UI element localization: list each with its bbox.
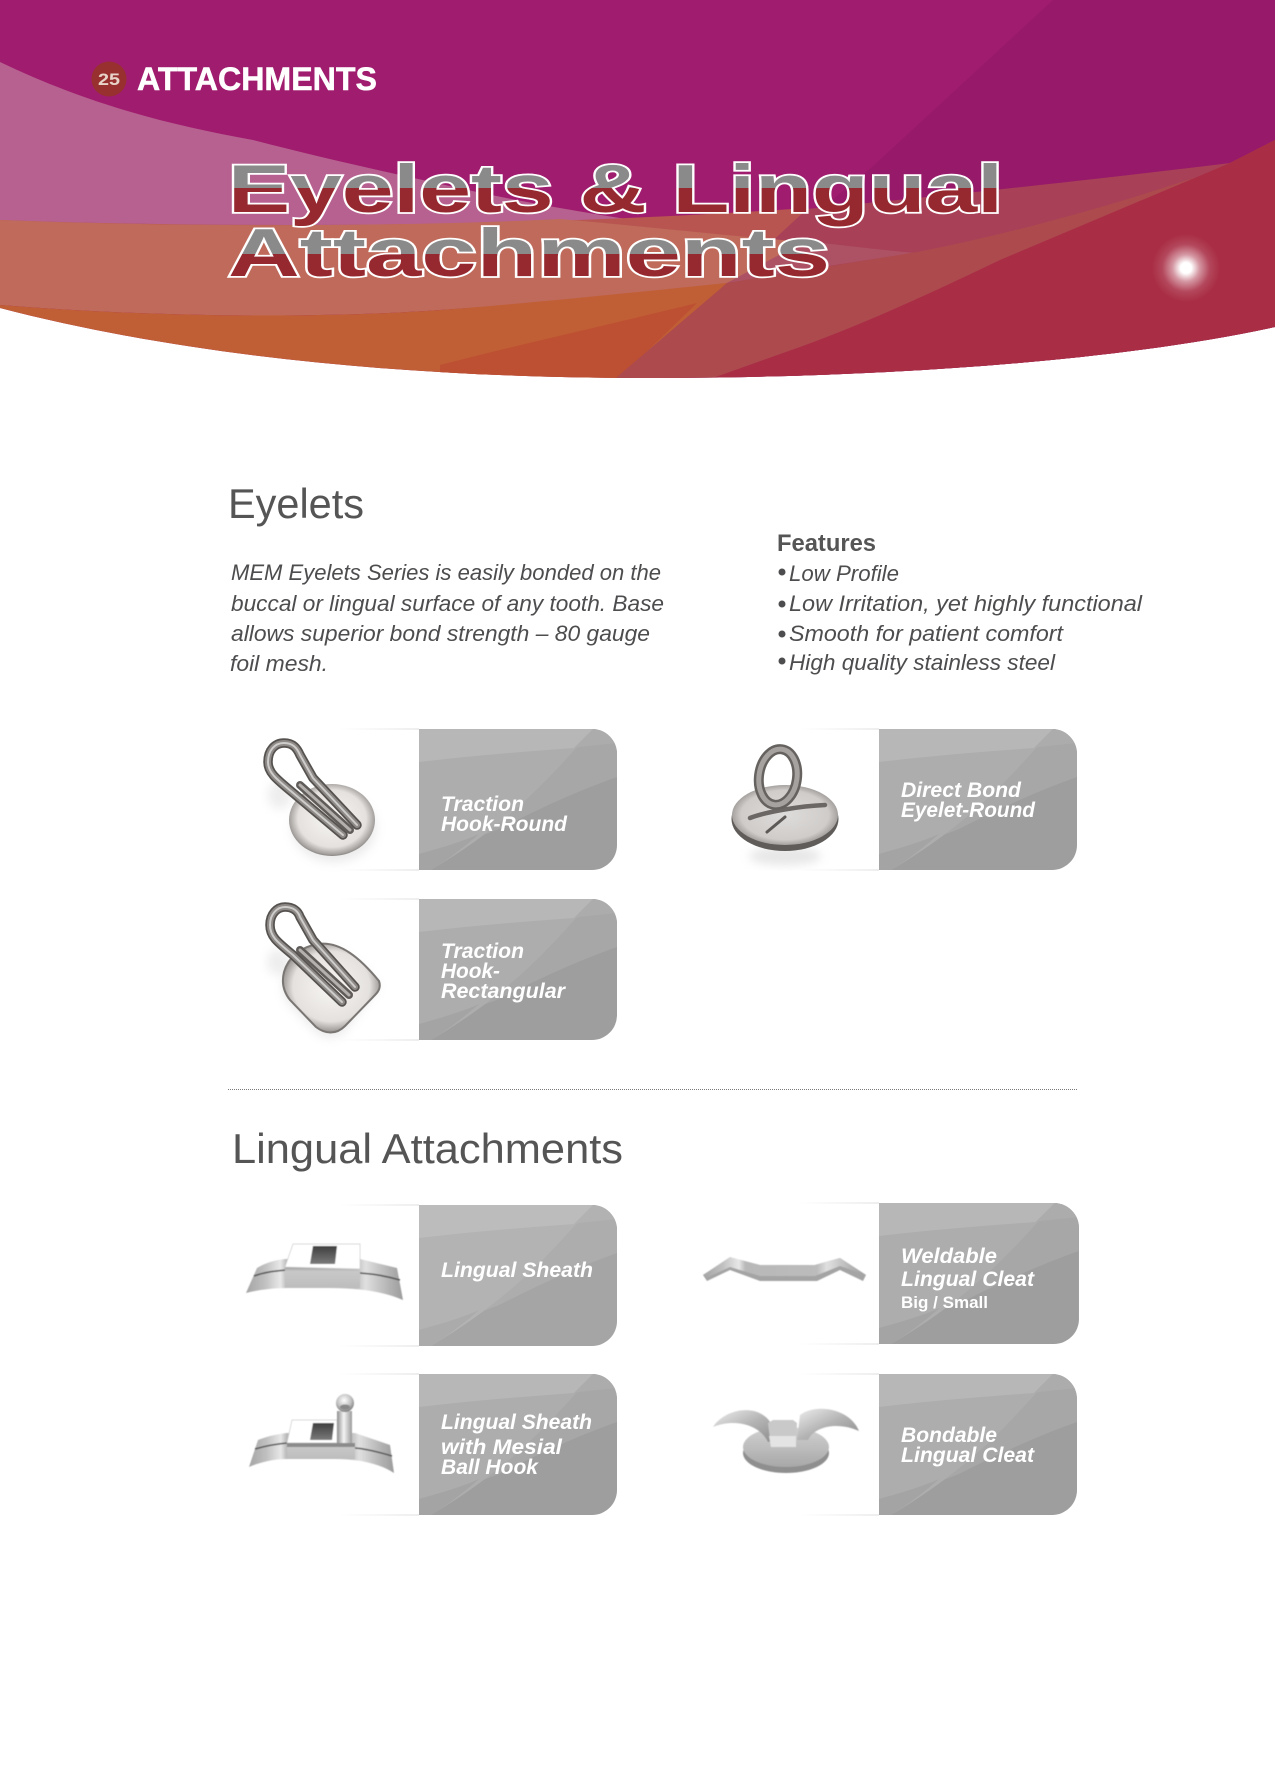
- features list: [777, 530, 1143, 675]
- feature items: Smooth for patient comfort: [789, 621, 1064, 646]
- card: Traction Hook-Round: [268, 728, 617, 870]
- label text: Lingual Sheath: [441, 1258, 593, 1282]
- product image: bondable cleat: [713, 1409, 859, 1473]
- label text: Bondable: [901, 1423, 997, 1447]
- feature items: Low Profile: [789, 561, 899, 586]
- feature items: Low Irritation, yet highly functional: [789, 591, 1143, 616]
- label panel: [339, 728, 617, 870]
- section label: ATTACHMENTS: ATTACHMENTS: [137, 61, 377, 97]
- label text: Traction: [441, 939, 524, 963]
- text block: eyelets description: foil mesh.: [230, 651, 328, 676]
- label text: Lingual Cleat: [901, 1267, 1035, 1291]
- label text: Lingual Sheath: [441, 1410, 592, 1434]
- heading: Lingual Attachments: Lingual Attachments: [232, 1125, 623, 1172]
- badge: page number 25: [92, 62, 126, 96]
- label text: [441, 1410, 592, 1479]
- product image: lingual sheath: [246, 1244, 403, 1300]
- label panel: [798, 1202, 1079, 1344]
- card: Lingual Sheath: [246, 1204, 617, 1346]
- label text: with Mesial: [441, 1435, 563, 1459]
- label text: [901, 778, 1036, 822]
- label text: Rectangular: [441, 979, 567, 1003]
- label text: [901, 1244, 1035, 1312]
- label text: Ball Hook: [441, 1455, 539, 1479]
- label text: [441, 792, 568, 836]
- feature items: [789, 561, 1143, 675]
- label panel: [339, 1204, 617, 1346]
- feature bullets: [778, 568, 786, 664]
- product image: rectangular hook: [267, 907, 380, 1038]
- label text: Big / Small: [901, 1293, 988, 1312]
- title: Eyelets & Lingual: [228, 151, 1003, 227]
- label text: [441, 939, 567, 1003]
- header banner: [0, 0, 1275, 400]
- label text: Hook-Round: [441, 812, 568, 836]
- label text: Lingual Cleat: [901, 1443, 1035, 1467]
- label text: Eyelet-Round: [901, 798, 1036, 822]
- label panel: [799, 1374, 1077, 1516]
- heading: Eyelets: Eyelets: [228, 480, 364, 527]
- label text: [901, 1423, 1035, 1467]
- title: Attachments: [228, 215, 830, 291]
- product image: round hook: [268, 743, 376, 862]
- label text: Direct Bond: [901, 778, 1022, 802]
- text block: eyelets description: allows superior bond strength – 80 gauge: [231, 621, 650, 646]
- label text: Weldable: [901, 1244, 997, 1268]
- text block: eyelets description: MEM Eyelets Series is easily bonded on the: [231, 560, 661, 585]
- dotted divider: [228, 1088, 1077, 1090]
- text block: eyelets description: [230, 560, 664, 676]
- label panel: [339, 898, 617, 1040]
- feature items: High quality stainless steel: [789, 650, 1056, 675]
- card: Lingual Sheath with Mesial Ball Hook: [249, 1374, 617, 1516]
- features heading: Features: [777, 530, 876, 557]
- label panel: [339, 1374, 617, 1516]
- label panel: [799, 728, 1077, 870]
- text block: eyelets description: buccal or lingual surface of any tooth. Base: [231, 591, 664, 616]
- card: Direct Bond Eyelet-Round: [732, 728, 1077, 870]
- badge: page number 25: 25: [98, 70, 120, 89]
- label text: Hook-: [441, 959, 500, 983]
- card: Traction Hook-Rectangular: [267, 898, 617, 1040]
- product image: sheath with ball hook: [249, 1394, 394, 1473]
- product image: round eyelet: [732, 747, 838, 865]
- title: [228, 151, 1003, 291]
- card: Bondable Lingual Cleat: [713, 1374, 1077, 1516]
- product image: weldable cleat: [703, 1257, 866, 1281]
- label text: Traction: [441, 792, 524, 816]
- card: Weldable Lingual Cleat: [703, 1202, 1079, 1344]
